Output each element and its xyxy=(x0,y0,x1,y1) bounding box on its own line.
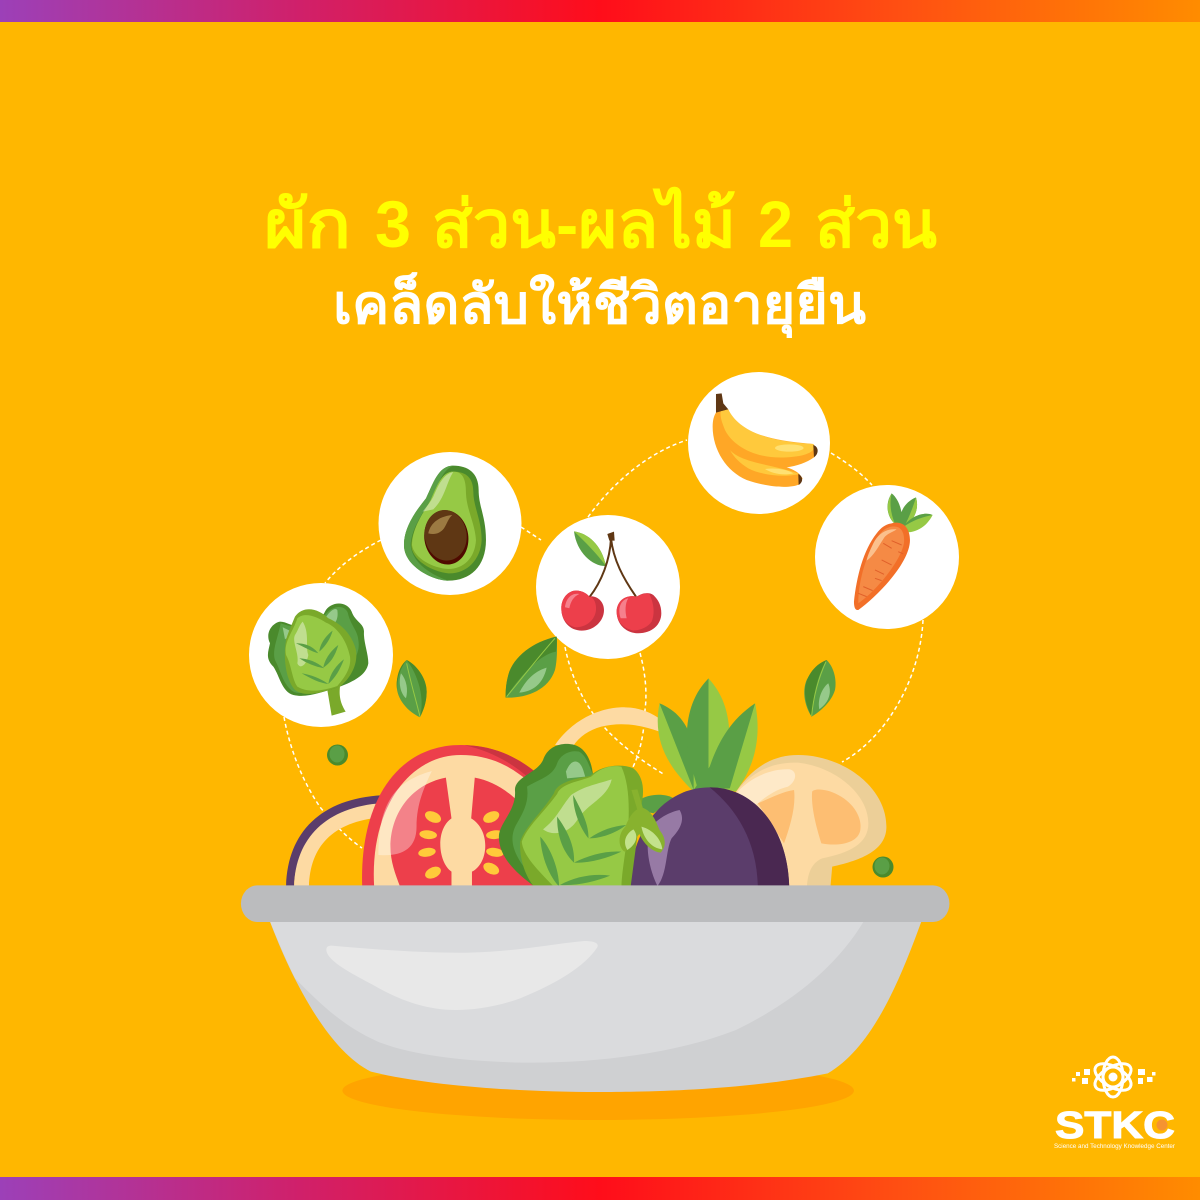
heading: yellow: ส่วน xyxy=(815,187,937,261)
logo: pixel squares xyxy=(1072,1069,1156,1084)
onion ring: back xyxy=(555,707,664,746)
logo: STKC xyxy=(1054,1057,1175,1150)
onion ring: left xyxy=(286,795,380,886)
bowl body xyxy=(269,920,922,1092)
heading: yellow: ส่วน-ผลไม้ xyxy=(432,186,736,261)
bowl light area xyxy=(269,920,865,1063)
vegetables in the bowl xyxy=(286,678,886,890)
logo: tagline: Science and Technology Knowledge Center xyxy=(1054,1144,1175,1150)
dashed orbit lines xyxy=(284,440,923,848)
bowl rim xyxy=(241,885,949,922)
leaf: floating large middle xyxy=(506,637,557,698)
logo: atom mark xyxy=(1091,1057,1135,1097)
circle icon: lettuce xyxy=(249,583,393,727)
logo: orange dot xyxy=(1156,1120,1168,1130)
bowl shadow xyxy=(342,1061,854,1120)
heading: yellow: 2 xyxy=(758,187,793,261)
pea: left xyxy=(327,744,348,766)
small sprout xyxy=(620,789,665,853)
tomato seeds xyxy=(417,809,505,881)
heading: yellow xyxy=(264,186,937,261)
logo: wordmark: STKC xyxy=(1055,1105,1175,1147)
eggplant xyxy=(630,787,789,890)
heading: yellow: 3 xyxy=(375,187,411,261)
eggplant leaves xyxy=(658,678,758,792)
pea: right xyxy=(872,856,894,878)
circle icon: cherries xyxy=(536,515,680,659)
bottom gradient bar xyxy=(0,1177,1200,1200)
title xyxy=(264,186,937,339)
tomato slice xyxy=(362,745,537,890)
back leaf behind eggplant xyxy=(639,795,674,813)
circle icon: avocado xyxy=(378,452,522,595)
top gradient bar xyxy=(0,0,1200,22)
mushroom xyxy=(734,755,886,890)
bowl highlight xyxy=(326,941,598,1010)
lettuce xyxy=(499,744,643,890)
leaf: floating right xyxy=(804,660,836,717)
circle icon: banana xyxy=(688,372,830,514)
subheading: white: เคล็ดลับให้ชีวิตอายุยืน xyxy=(333,273,866,339)
circle icon: carrot xyxy=(815,485,959,629)
bowl xyxy=(241,885,949,1120)
heading: yellow: ผัก xyxy=(264,187,351,261)
leaf: floating small left xyxy=(397,660,427,717)
